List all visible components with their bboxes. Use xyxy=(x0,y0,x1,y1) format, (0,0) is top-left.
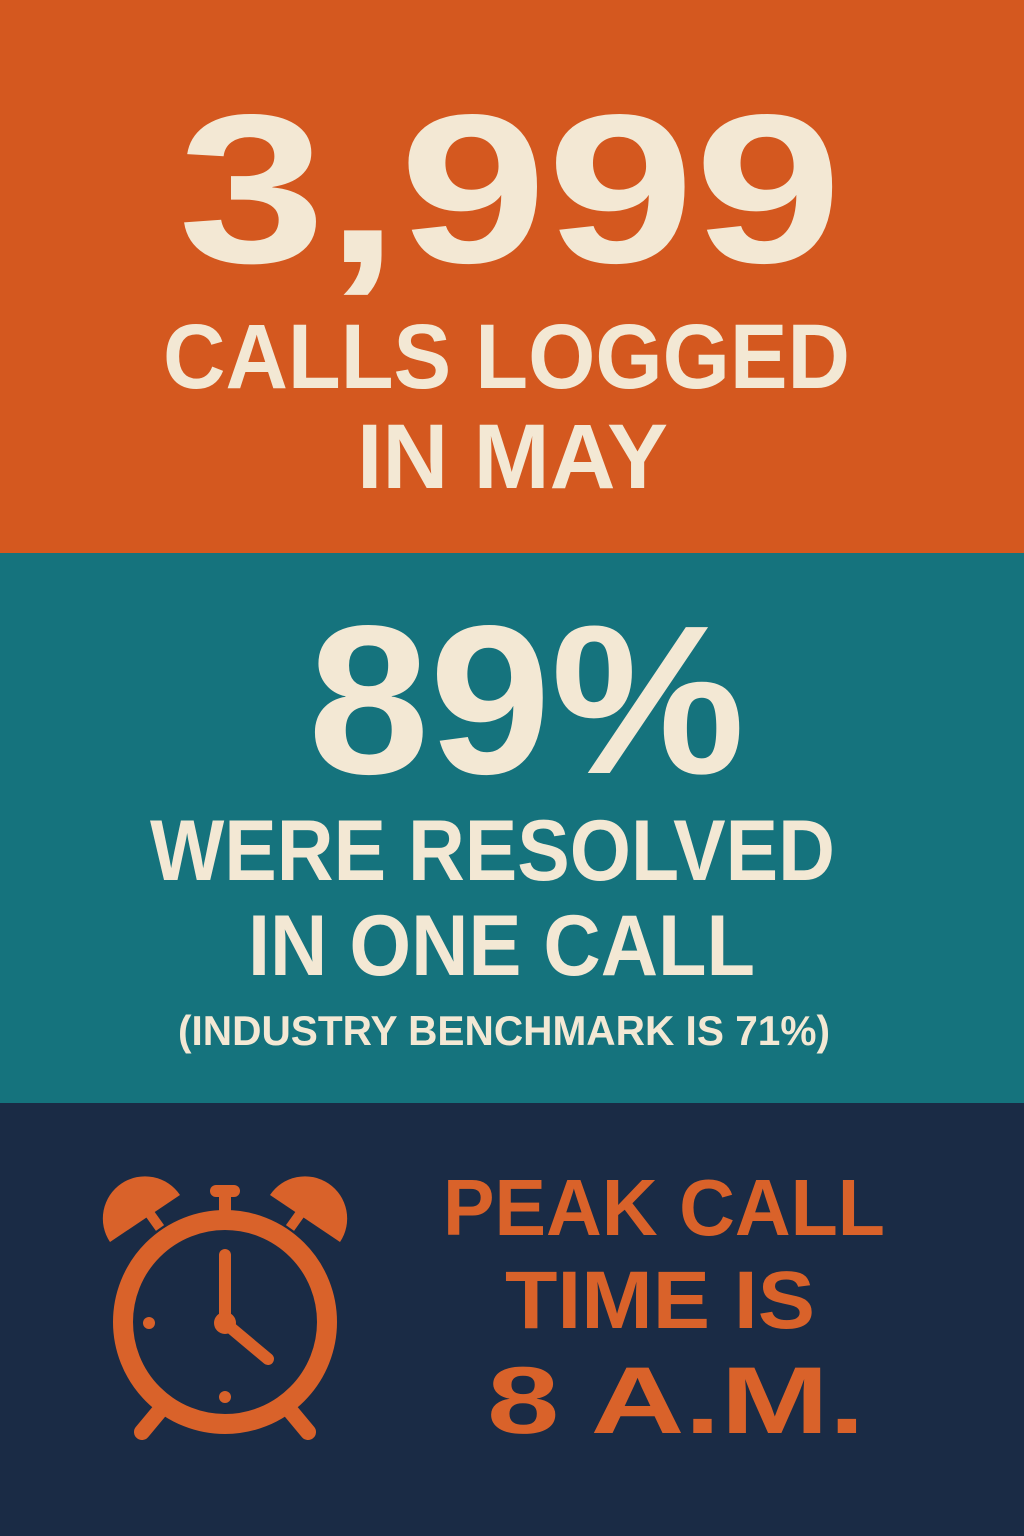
text: resolved in one call xyxy=(150,803,835,994)
text: benchmark: (INDUSTRY BENCHMARK IS 71%) xyxy=(178,1007,830,1054)
text: peak call time: PEAK CALL xyxy=(443,1163,885,1252)
panel: calls logged xyxy=(0,0,1024,553)
text: peak call time: 8 A.M. xyxy=(487,1348,865,1454)
text: calls logged in may: CALLS LOGGED xyxy=(163,306,850,408)
text: calls logged in may: IN MAY xyxy=(357,406,668,508)
text: resolved in one call: WERE RESOLVED xyxy=(150,803,835,899)
text: peak call time: TIME IS xyxy=(505,1255,815,1346)
panel: resolution rate xyxy=(0,553,1024,1103)
big number 3,999: 3,999 xyxy=(178,70,842,307)
text: peak call time xyxy=(443,1163,885,1454)
text: resolved in one call: IN ONE CALL xyxy=(248,898,755,994)
icon: alarm clock xyxy=(103,1176,347,1432)
panel: peak time xyxy=(0,1103,1024,1536)
big number 89%: 89% xyxy=(308,581,745,818)
text: calls logged in may xyxy=(163,306,850,508)
